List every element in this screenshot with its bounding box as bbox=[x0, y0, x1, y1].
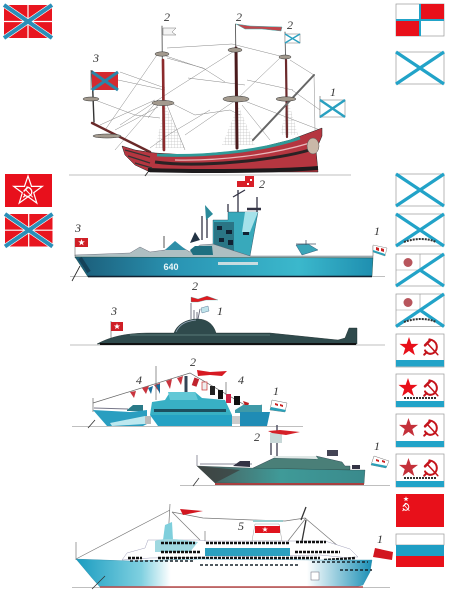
flag: guards Soviet ensign bbox=[396, 374, 444, 407]
masts bbox=[93, 366, 226, 412]
hulls bbox=[93, 410, 147, 426]
hull bbox=[75, 257, 373, 277]
hull bbox=[122, 128, 322, 172]
flag: saint Andrew bbox=[396, 52, 444, 84]
stern flag bbox=[371, 456, 389, 468]
hull bbox=[76, 559, 372, 587]
decks bbox=[122, 540, 358, 560]
bow flag bbox=[320, 96, 345, 118]
waterline bbox=[180, 484, 390, 486]
long pennant bbox=[236, 24, 282, 31]
rigging bbox=[92, 44, 320, 150]
flag: top-right quartered bbox=[396, 4, 444, 36]
waterline bbox=[72, 426, 303, 428]
flag: Soviet guards jack bbox=[5, 174, 52, 207]
ship: sailing frigate bbox=[69, 24, 351, 176]
ship number labels: 2 bbox=[164, 10, 170, 24]
ship number labels: 2 bbox=[287, 18, 293, 32]
flag: Soviet ensign bbox=[396, 334, 444, 367]
windows bbox=[128, 542, 355, 569]
waterline bbox=[70, 276, 385, 278]
ship number labels: 5 bbox=[238, 519, 244, 533]
ship number labels: 1 bbox=[374, 224, 380, 238]
superstructure bbox=[253, 456, 350, 470]
ship number labels: 2 bbox=[190, 355, 196, 369]
pennant bbox=[180, 509, 203, 515]
ship number labels: 1 bbox=[330, 85, 336, 99]
hull number: 640 bbox=[164, 262, 179, 272]
masts and radars bbox=[202, 190, 261, 240]
ship number labels: 4 bbox=[136, 373, 142, 387]
deck equipment bbox=[75, 243, 373, 258]
hull bbox=[197, 466, 365, 484]
ship: aircraft cruiser bbox=[70, 176, 387, 281]
funnel bbox=[252, 524, 282, 541]
ship number labels: 2 bbox=[254, 430, 260, 444]
flag: naval jack lower bbox=[5, 214, 52, 246]
stern flag bbox=[270, 400, 287, 412]
flag: tricolour bbox=[396, 534, 444, 567]
hull bbox=[97, 319, 357, 344]
flag: guards Red Banner ensign bbox=[396, 454, 444, 487]
ship number labels: 3 bbox=[92, 51, 99, 65]
waterline bbox=[70, 344, 385, 346]
small jack bbox=[201, 306, 209, 313]
pennant bbox=[191, 296, 218, 302]
waterline bbox=[69, 174, 351, 176]
stern flag bbox=[373, 548, 393, 560]
flag: guards Red Banner Andrew bbox=[396, 294, 444, 326]
ship number labels: 2 bbox=[192, 279, 198, 293]
ship number labels: 1 bbox=[377, 532, 383, 546]
ratlines bbox=[155, 105, 185, 148]
waterline bbox=[72, 586, 390, 588]
superstructure bbox=[213, 212, 258, 256]
top flag bbox=[237, 176, 254, 187]
rail bbox=[94, 408, 128, 409]
stern flag bbox=[75, 238, 88, 256]
ship number labels: 3 bbox=[110, 304, 117, 318]
ship number labels: 2 bbox=[259, 177, 265, 191]
ship number labels bbox=[74, 10, 383, 546]
ship number labels: 2 bbox=[236, 10, 242, 24]
ship: submarine bbox=[70, 296, 385, 345]
signal bunting bbox=[93, 373, 262, 410]
ship number labels: 1 bbox=[217, 304, 223, 318]
flag: saint Andrew bbox=[396, 174, 444, 206]
flag: Red Banner Andrew bbox=[396, 254, 444, 286]
white pennant bbox=[163, 28, 176, 35]
flag: Red Banner ensign bbox=[396, 414, 444, 447]
bow flag bbox=[373, 245, 387, 256]
ship: cruise liner bbox=[72, 504, 393, 589]
small flag at mast bbox=[285, 34, 300, 43]
ship number labels: 1 bbox=[374, 439, 380, 453]
ship number labels: 4 bbox=[238, 373, 244, 387]
ship number labels: 3 bbox=[74, 221, 81, 235]
superstructure bbox=[150, 392, 232, 415]
ship: patrol boat bbox=[180, 425, 390, 486]
hull stripes bbox=[155, 148, 316, 164]
helicopter bbox=[296, 240, 318, 255]
ship number labels: 1 bbox=[273, 384, 279, 398]
pennant bbox=[197, 370, 227, 376]
stern flag bbox=[111, 321, 123, 338]
pennant bbox=[268, 430, 300, 435]
masts bbox=[92, 24, 314, 152]
mast tops bbox=[83, 48, 296, 138]
flag: USSR bbox=[396, 494, 444, 527]
ship: hovercraft bbox=[72, 366, 303, 428]
flag: Russian naval jack bbox=[4, 5, 52, 38]
stern flag bbox=[91, 70, 118, 90]
rigging bbox=[76, 510, 345, 559]
flag: guards Andrew bbox=[396, 214, 444, 246]
